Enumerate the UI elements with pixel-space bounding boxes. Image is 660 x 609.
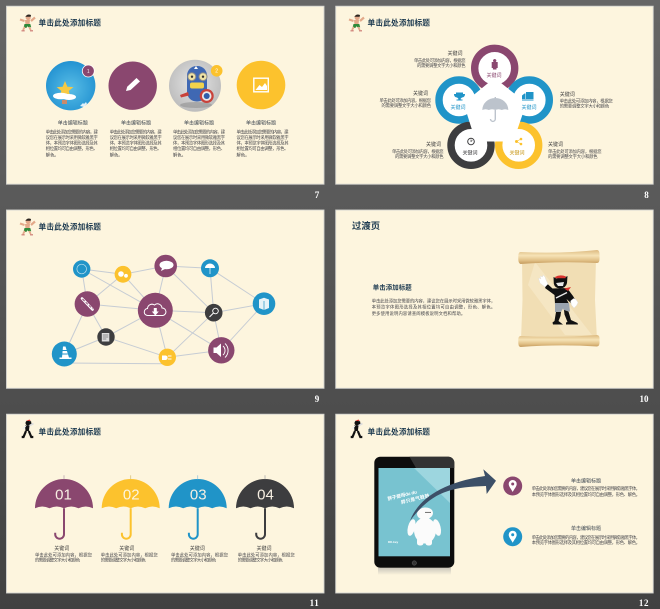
column 2 text: 单击此处添加您需要的内容，建: [110, 128, 162, 136]
note mid-right: 关键词: [560, 91, 575, 98]
column 1 text: 单击此处添加您需要的内容，建: [46, 128, 99, 136]
screen text: 胖子是呀du du: [387, 488, 418, 502]
note bottom-left: [392, 141, 444, 160]
icon: blue pin: [503, 527, 522, 546]
node: speech: [154, 255, 177, 277]
page number 7: 7: [315, 190, 320, 200]
node: smile: [73, 260, 90, 278]
slide 9: network diagram: [6, 210, 324, 388]
text block 2: 单击此处添加您需要的内容，建议您在展示时采用微软雅黑字体，: [532, 534, 640, 541]
page number 9: 9: [315, 394, 320, 404]
icon: boy mascot: [20, 14, 35, 31]
icon: share: [515, 138, 522, 145]
icon: ninja mascot: [22, 420, 34, 437]
ring labels: [450, 72, 537, 156]
node: umbrella: [201, 259, 219, 277]
icon: central umbrella: [482, 97, 508, 121]
note mid-left: 单击此处可添加内容，根据您: [380, 97, 432, 104]
note mid-left: 的需要调整文字大小和颜色: [382, 102, 432, 109]
scroll illustration: [518, 250, 600, 347]
column 4 text: 相位置均可自由调整，形色、: [236, 145, 288, 152]
torso and arms: [545, 284, 576, 304]
slide 10: transition page: [336, 210, 653, 388]
body text: 本预览字体图形选择及其相位置均可自由调整，形色、解色。: [372, 304, 495, 311]
badge 1: 1: [87, 69, 90, 75]
baymax: [406, 506, 443, 546]
ninja character: [538, 275, 578, 324]
text block 1: 单击此处添加您需要的内容，建议您在展示时采用微软雅黑字体，: [532, 485, 640, 492]
slide 8: five-ring diagram: [336, 6, 653, 184]
text block 1: [532, 478, 640, 498]
text block 1: 单击编辑标题: [571, 478, 601, 484]
column 2 text: 体，本预览字体图形选择及其: [110, 140, 162, 146]
column 1 text: 单击编辑标题: [58, 120, 88, 126]
umbrella 04: [236, 475, 294, 539]
text block 2: 本预览字体图形选择及其相位置均可自由调整，形色、解色。: [532, 539, 640, 546]
umbrella 1 text: [35, 545, 93, 563]
curved arrow: [410, 469, 496, 521]
column 4 text: 解色。: [236, 151, 249, 158]
note bottom-left: 关键词: [426, 141, 441, 148]
column 4 text: [236, 120, 289, 158]
title: 单击此处添加标题: [368, 18, 430, 28]
icon: purple pin: [503, 476, 522, 496]
ring labels: 关键词: [509, 150, 525, 156]
umbrella 1 text: 的需要调整文字大小和颜色: [35, 556, 81, 563]
column 3 text: 解色。: [173, 151, 186, 158]
note bottom-right: 关键词: [548, 141, 563, 148]
ring labels: 关键词: [486, 72, 502, 79]
note top-left: 关键词: [447, 50, 462, 57]
text block 1: 本预览字体图形选择及其相位置均可自由调整，形色、解色。: [532, 491, 640, 498]
column 2 text: 单击编辑标题: [121, 120, 151, 126]
column 2 text: 相位置均可自由调整，形色、: [110, 145, 162, 152]
note bottom-right: 的需要调整文字大小和颜色: [548, 153, 598, 160]
umbrella 4 text: [238, 545, 295, 563]
column 1 text: [46, 120, 99, 158]
column 3 text: 相位置均可自由调整，形色、: [173, 145, 225, 152]
note top-left: 单击此处可添加内容，根据您: [414, 57, 466, 64]
note top-left: 的需要调整文字大小和颜色: [417, 62, 466, 69]
column 4 text: 单击此处添加您需要的内容，建: [236, 128, 289, 136]
five rings: [439, 48, 549, 165]
column 1 text: 议您在展示时采用微软雅黑字: [46, 134, 98, 141]
icon: boy mascot: [349, 14, 364, 31]
badge 2: [211, 65, 222, 77]
title: 单击此处添加标题: [38, 18, 101, 28]
umbrella 01: [35, 475, 93, 539]
column 4 text: 单击编辑标题: [246, 120, 276, 126]
node: magnifier: [205, 304, 222, 322]
slide 11: four umbrellas: [6, 414, 324, 593]
note mid-right: [560, 91, 613, 109]
icon: clock: [468, 138, 474, 145]
umbrella 04: 04: [257, 486, 274, 503]
body text: 单击此处添加您需要的内容，建议您在展示时采用微软雅黑字体，: [372, 298, 495, 304]
node: gears: [115, 266, 131, 283]
node: traffic cone: [52, 342, 77, 366]
slide 11 panel: [6, 414, 324, 593]
central white pentagon: [466, 81, 524, 139]
column 1 text: 相位置均可自由调整，形色、: [46, 145, 98, 152]
note bottom-left: 单击此处可添加内容，根据您: [392, 148, 444, 155]
umbrella 4 text: 单击此处可添加内容，根据您: [238, 552, 295, 558]
legs and boots: [552, 310, 578, 324]
umbrella 02: [102, 475, 160, 539]
tablet: [374, 457, 454, 575]
screen text: [387, 488, 430, 544]
node: notes: [97, 328, 115, 346]
ring labels: 关键词: [521, 104, 537, 111]
umbrella 3 text: 单击此处可添加内容，根据您: [171, 552, 229, 558]
column 4 text: 议您在展示时采用微软雅黑字: [236, 134, 288, 141]
head: [554, 276, 568, 288]
network links: [64, 266, 264, 364]
umbrella 01: 01: [55, 486, 72, 503]
page number 11: 11: [310, 598, 319, 608]
icon: boy mascot: [20, 218, 35, 235]
slide 12 panel: [336, 414, 653, 593]
body text: 更多使用说明内容请查阅模板说明文档和帮助。: [372, 310, 465, 317]
icon: person: [492, 59, 498, 70]
home button: [412, 561, 416, 565]
column 2 text: 解色。: [110, 151, 123, 158]
column 2 text: 议您在展示时采用微软雅黑字: [110, 134, 162, 141]
note top-left: [414, 50, 466, 69]
umbrella 02: 02: [123, 486, 140, 503]
title: 单击此处添加标题: [368, 426, 430, 436]
text block 2: 单击编辑标题: [571, 525, 601, 532]
node: plug: [159, 349, 176, 366]
slide 7: four circles: [6, 6, 324, 184]
note mid-right: 单击此处可添加内容，根据您: [560, 98, 613, 104]
top roller: [518, 250, 600, 264]
title: 单击此处添加标题: [38, 426, 101, 436]
ring labels: 关键词: [450, 104, 466, 111]
icon: truck: [522, 92, 534, 100]
column 4 text: 体，本预览字体图形选择及其: [236, 140, 289, 146]
shorts: [555, 303, 570, 312]
umbrella 3 text: 的需要调整文字大小和颜色: [171, 556, 217, 563]
column 3 text: [173, 120, 226, 158]
page number 10: 10: [640, 394, 649, 404]
icon: trophy: [454, 92, 465, 100]
node: chain: [75, 291, 100, 317]
column 1 text: 解色。: [46, 151, 59, 158]
column 3 text: 单击编辑标题: [184, 120, 214, 126]
note mid-right: 的需要调整文字大小和颜色: [560, 102, 610, 109]
ring labels: 关键词: [462, 150, 478, 156]
node: cloud download: [138, 293, 173, 328]
circle 4: image icon: [237, 61, 285, 109]
circle 2: pencil icon: [108, 61, 157, 110]
column 2 text: [110, 120, 162, 158]
umbrella 1 text: 关键词: [54, 545, 69, 552]
title: 单击此处添加标题: [38, 222, 101, 232]
badge 1: [82, 65, 94, 77]
icon: ninja mascot: [351, 420, 362, 437]
screen text: 胖只是气鼓鼓: [400, 492, 430, 506]
umbrella 03: 03: [190, 486, 207, 503]
node: speaker: [208, 337, 234, 363]
note bottom-right: 单击此处可添加内容，根据您: [548, 148, 602, 155]
circle 1: star picture: [46, 61, 95, 110]
tablet screen: [378, 468, 450, 556]
tablet reflection: [378, 568, 451, 575]
text block 2: [532, 525, 640, 546]
title: 过渡页: [352, 220, 380, 231]
body text: [372, 298, 495, 317]
note mid-left: 关键词: [413, 90, 428, 97]
umbrella 1 text: 单击此处可添加内容，根据您: [35, 552, 93, 558]
slide 9 panel: [6, 210, 324, 388]
umbrella 4 text: 关键词: [256, 545, 272, 552]
node: box: [253, 292, 275, 315]
umbrella 03: [169, 475, 227, 539]
column 3 text: 议您在展示时采用微软雅黑字: [173, 134, 225, 141]
slide 10 panel: [336, 210, 653, 388]
circle 3: minion picture: [169, 60, 221, 112]
screen text: DK.key: [388, 540, 399, 544]
badge 2: 2: [215, 69, 218, 75]
umbrella 4 text: 的需要调整文字大小和颜色: [238, 556, 283, 563]
tablet body: [374, 457, 454, 568]
slide 8 panel: [336, 6, 653, 184]
umbrella 2 text: 单击此处可添加内容，根据您: [101, 552, 158, 558]
column 3 text: 单击此处添加您需要的内容，建: [173, 128, 226, 136]
note mid-left: [380, 90, 432, 109]
gloves: [538, 275, 548, 287]
note bottom-left: 的需要调整文字大小和颜色: [395, 153, 444, 160]
umbrella 2 text: 关键词: [119, 545, 134, 552]
slide 7 panel: [6, 6, 324, 184]
note bottom-right: [548, 141, 602, 160]
page number 12: 12: [639, 598, 649, 608]
column 3 text: 体，本预览字体图形选择及其: [173, 140, 226, 146]
slide 12: tablet and arrow: [336, 414, 653, 593]
column 1 text: 体，本预览字体图形选择及其: [46, 140, 99, 146]
umbrella 3 text: 关键词: [190, 545, 205, 552]
umbrella 3 text: [171, 545, 229, 563]
bottom roller: [518, 335, 600, 347]
umbrella 2 text: 的需要调整文字大小和颜色: [101, 556, 146, 563]
umbrella 2 text: [101, 545, 158, 563]
page number 8: 8: [644, 190, 649, 200]
scroll paper: [521, 258, 597, 340]
subheading: 单击添加标题: [373, 282, 412, 292]
